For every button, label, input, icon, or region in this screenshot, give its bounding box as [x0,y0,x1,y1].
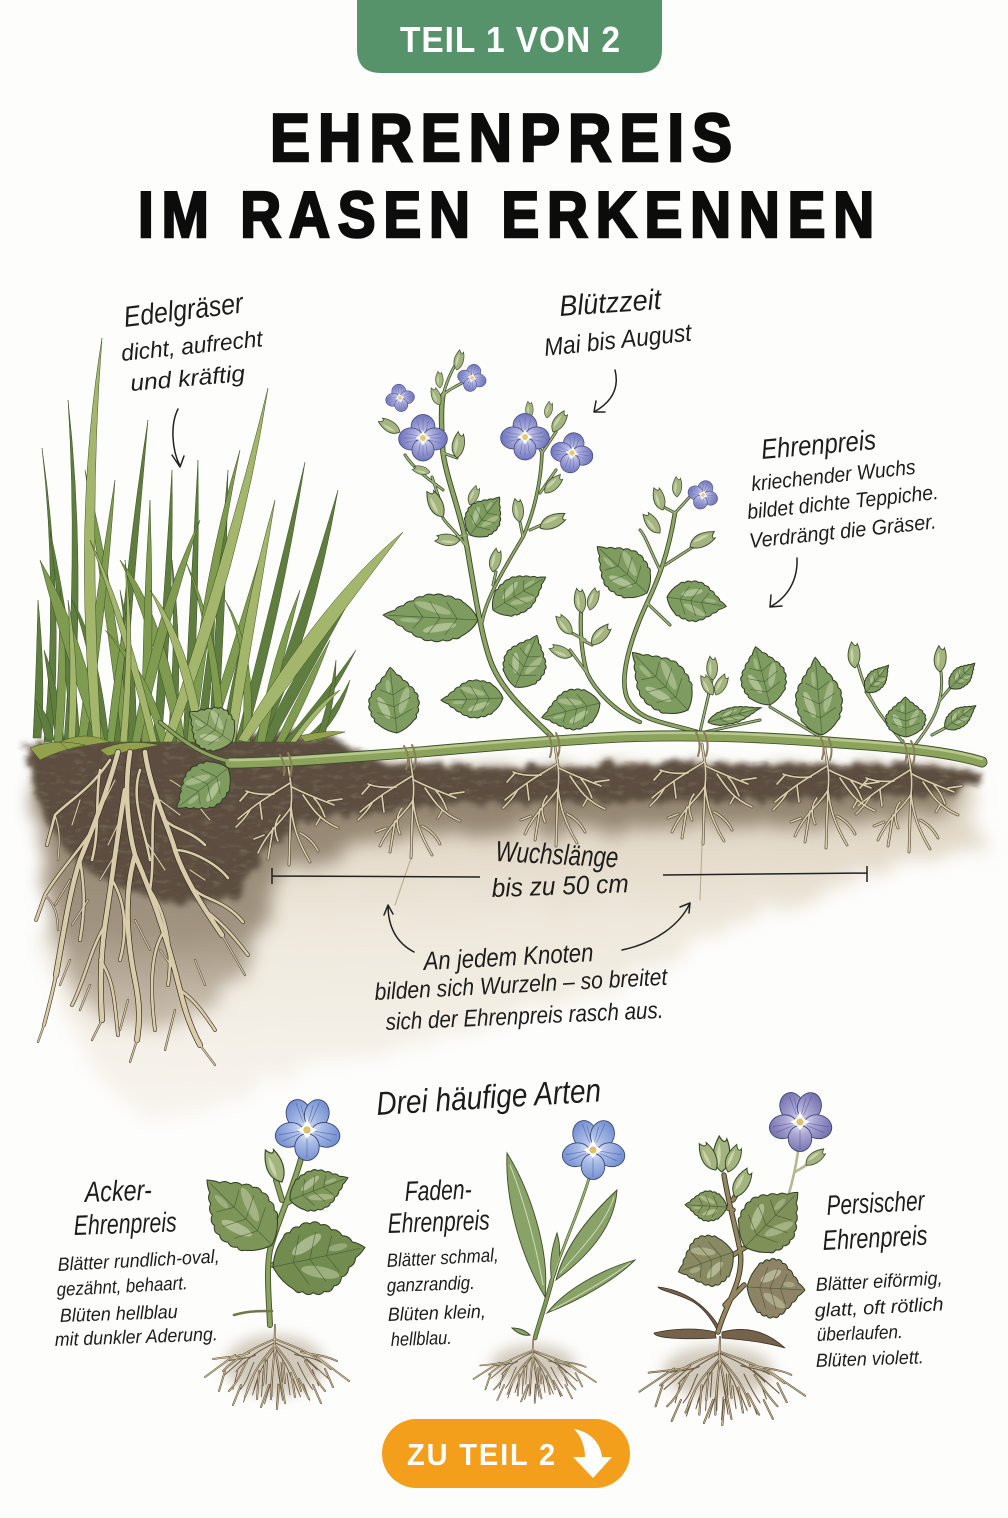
grass clump [30,338,403,760]
node roots [236,744,962,905]
main Ehrenpreis plant [160,349,982,826]
description: hellblau. [390,1328,452,1351]
description: Blüten hellblau [59,1302,179,1327]
label: Ehrenpreis: kriechender Wuchs [750,456,917,496]
description [814,1268,944,1372]
description: Blätter schmal, [386,1245,499,1272]
name [73,1175,177,1241]
description [54,1247,220,1351]
soil cross-section [26,733,985,1125]
label: Knoten: sich der Ehrenpreis rasch aus. [385,997,664,1036]
measure: Wuchslänge [272,836,867,903]
plant illustration [474,1118,635,1403]
button: zu Teil 2 [382,1419,630,1488]
label: Blützzeit: Mai bis August [543,319,694,362]
species: Faden-Ehrenpreis [386,1118,635,1403]
button: zu Teil 2: ZU TEIL 2 [407,1437,557,1472]
description: überlaufen. [816,1322,903,1346]
title: IM RASEN ERKENNEN [138,178,882,251]
label: Knoten: An jedem Knoten [421,937,594,976]
title [138,100,882,251]
name: Ehrenpreis [822,1220,928,1256]
name: Faden- [404,1174,472,1207]
root knots on the runner [280,732,915,777]
arrow: to grass [172,409,184,467]
badge: part 1 of 2: TEIL 1 VON 2 [400,19,621,60]
description: Blätter rundlich-oval, [57,1247,220,1276]
label: Edelgräser: dicht, aufrecht [120,325,265,366]
name: Acker- [83,1175,152,1209]
label: Ehrenpreis: Ehrenpreis [760,424,877,465]
upright stems [405,362,950,745]
label: Ehrenpreis [746,424,939,553]
measure: Wuchslänge: bis zu 50 cm [491,868,629,903]
description: mit dunkler Aderung. [54,1324,218,1351]
creeping runner [160,722,982,763]
measure: Wuchslänge: Wuchslänge [495,836,619,874]
name: Ehrenpreis [73,1206,177,1241]
label: Knoten [374,937,669,1036]
label: Blützzeit: Blützzeit [558,284,664,323]
grass: mid blades [40,450,330,742]
blue flowers [383,361,723,514]
description: Blätter eiförmig, [815,1268,943,1296]
label: Knoten: bilden sich Wurzeln – so breitet [374,964,669,1006]
roots of the grass clump [36,752,248,1065]
name [387,1174,490,1239]
plant illustration [640,1090,834,1425]
icon: down arrow [573,1429,612,1478]
grass: highlighted blades [68,338,403,742]
species: Persischer Ehrenpreis [640,1090,944,1425]
name: Persischer [826,1185,926,1221]
name: Ehrenpreis [387,1204,490,1239]
flower buds [376,349,946,698]
description: Blüten klein, [387,1302,486,1326]
description: Blüten violett. [815,1347,924,1372]
description: gezähnt, behaart. [56,1273,188,1301]
plant illustration [184,1097,373,1409]
leaves along the runner [163,486,981,826]
badge: part 1 of 2 [357,0,662,73]
species: Acker-Ehrenpreis [54,1097,373,1409]
label: Ehrenpreis: Verdrängt die Gräser. [748,510,937,553]
label: Ehrenpreis: bildet dichte Teppiche. [746,481,939,524]
grass: moss at base [30,732,345,760]
description: glatt, oft rötlich [814,1294,944,1322]
arrow: to flowers [594,370,616,412]
description [386,1245,499,1351]
heading: three species: Drei häufige Arten [375,1071,602,1122]
arrow: to runner plant [770,558,797,607]
description: ganzrandig. [386,1273,475,1297]
name [822,1185,928,1256]
label: Edelgräser [120,287,265,396]
grass: back blades [33,400,356,742]
label: Edelgräser: und kräftig [129,360,246,396]
label: Edelgräser: Edelgräser [122,287,246,334]
arrows: to root nodes [384,903,690,952]
title: EHRENPREIS [270,100,740,176]
label: Blützzeit [543,284,694,362]
